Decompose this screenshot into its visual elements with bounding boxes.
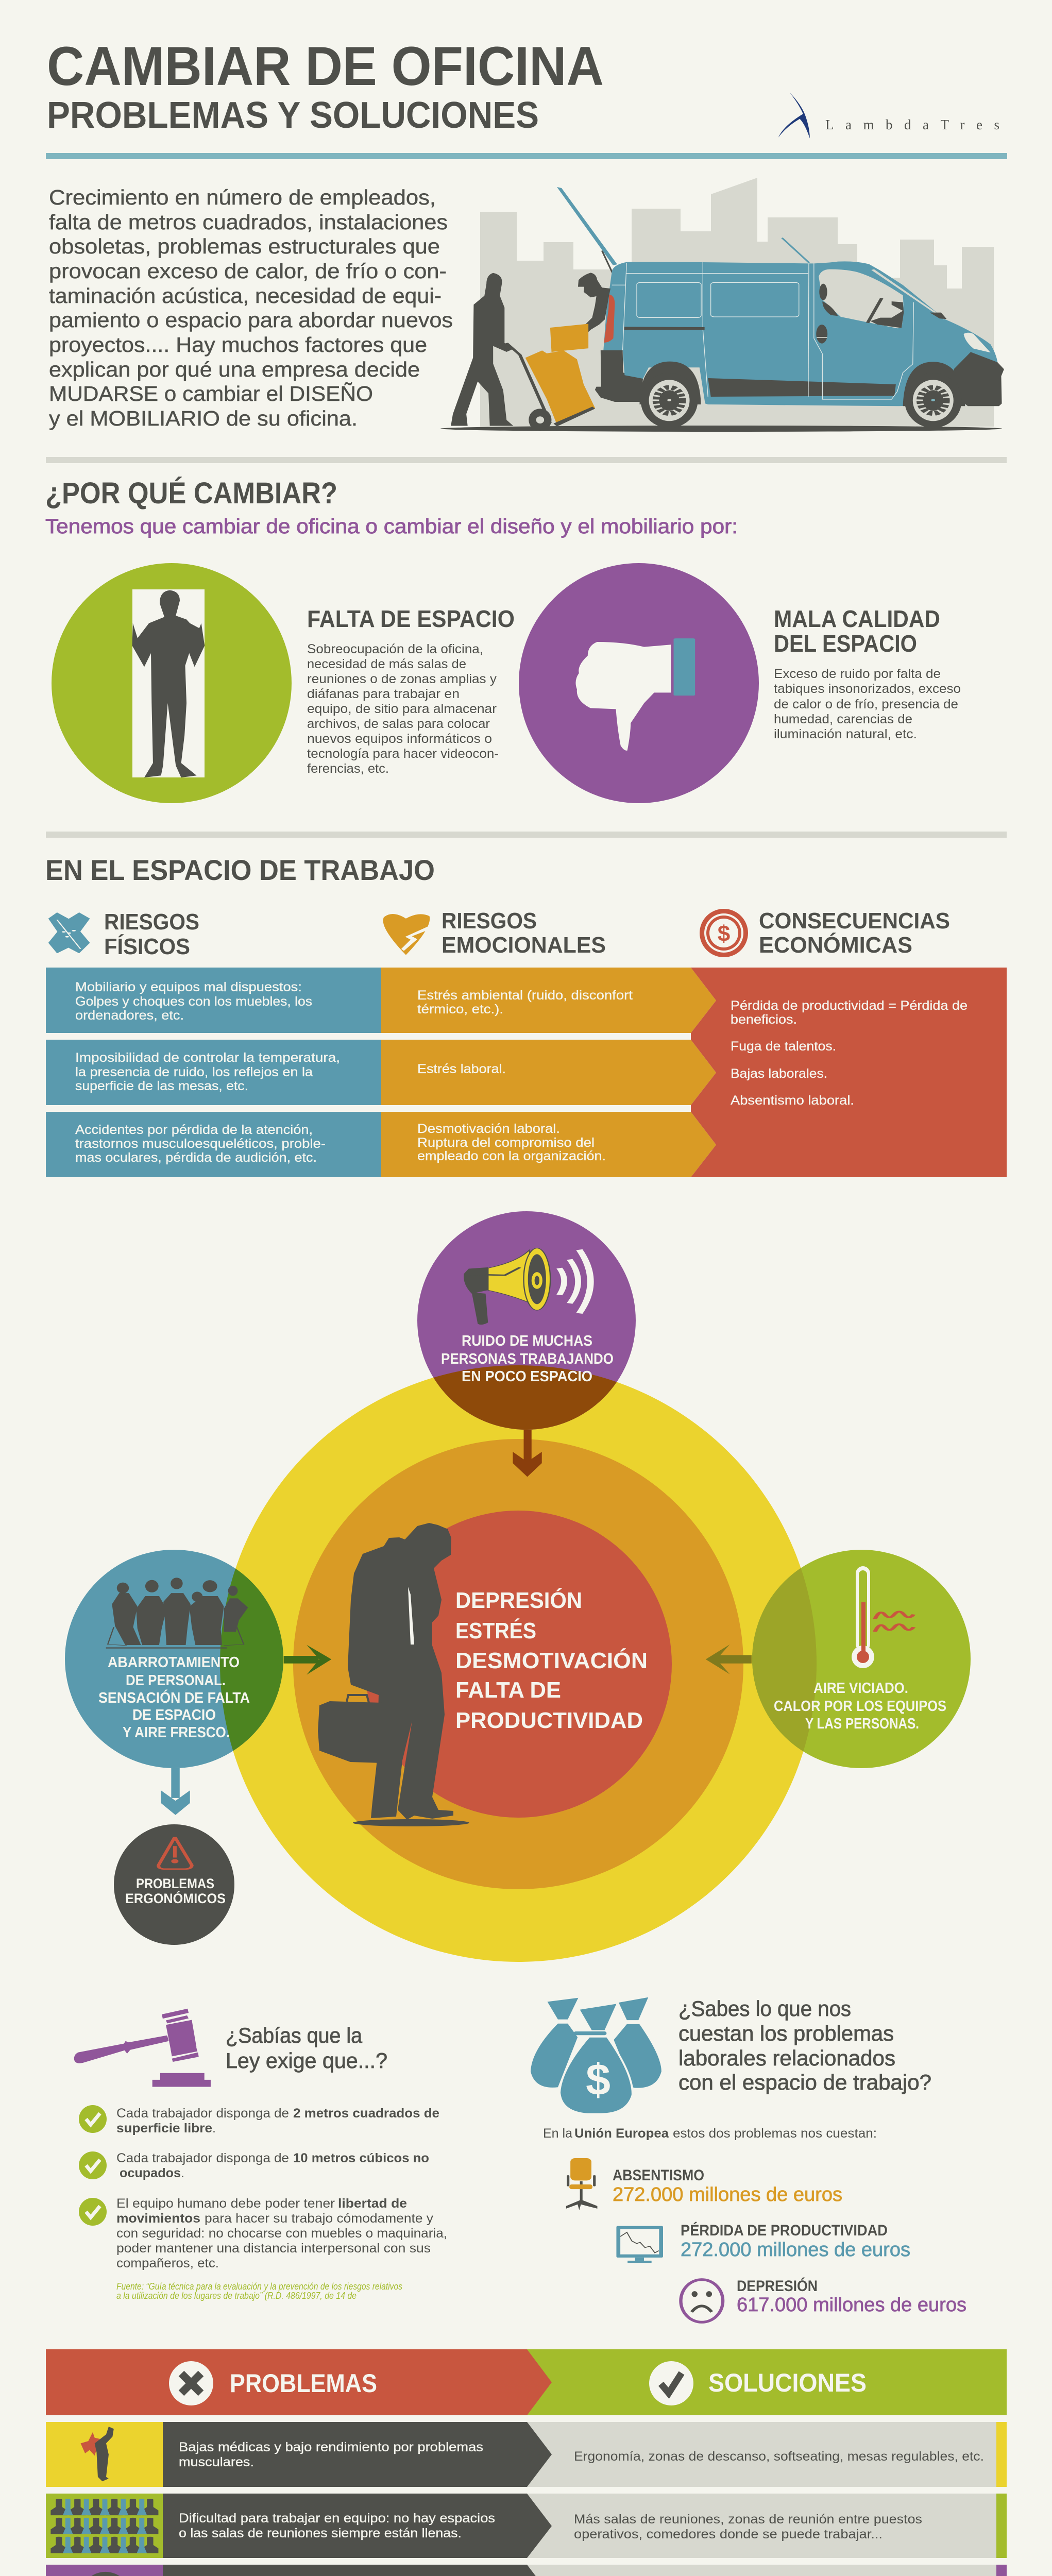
column: riesgos emocionales [381, 968, 716, 1177]
column: consecuencias económicas: Pérdida de productividad = Pérdida de [731, 998, 968, 1013]
checklist item 1: 2 metros cuadrados de [293, 2106, 439, 2121]
panel: coste de los problemas laborales [531, 1996, 966, 2322]
checklist item 2 [79, 2151, 429, 2180]
row 2: trabajo en equipo: Dificultad para trabajar en equipo: no hay espacios [179, 2511, 495, 2526]
column: consecuencias económicas: Absentismo laboral. [731, 1093, 854, 1108]
text: Sobreocupación de la oficina, [307, 642, 483, 656]
checklist item 2: . [181, 2166, 184, 2180]
checklist item 1 [79, 2105, 439, 2136]
column heading: riesgos emocionales: EMOCIONALES [442, 933, 606, 958]
icon: coin [700, 909, 748, 957]
checklist item 3: libertad de [338, 2196, 407, 2211]
callout: abarrotamiento: ABARROTAMIENTO [108, 1654, 240, 1671]
intro paragraph: MUDARSE o cambiar el DISEÑO [49, 382, 373, 405]
checklist item 3: poder mantener una distancia interpersonal con sus [116, 2241, 431, 2256]
heading [678, 1996, 931, 2094]
heading [226, 2023, 387, 2073]
icon: back pain [81, 2427, 114, 2481]
callout: aire viciado: Y LAS PERSONAS. [805, 1716, 919, 1732]
text: FALTA DE ESPACIO [307, 605, 515, 632]
row 1: problemas musculares: Bajas médicas y bajo rendimiento por problemas [179, 2440, 483, 2454]
callout: problemas ergonómicos: PROBLEMAS [136, 1876, 214, 1891]
icon: crowd of people [106, 1578, 248, 1649]
icon: coin: $ [718, 921, 730, 946]
checklist item 1: Cada trabajador disponga de [116, 2106, 289, 2121]
checklist item 2: 10 metros cúbicos no [293, 2151, 429, 2165]
heading: por qué cambiar: Tenemos que cambiar de oficina o cambiar el diseño y el mobiliario por: [45, 515, 738, 538]
row 2: trabajo en equipo: operativos, comedores donde se puede trabajar... [574, 2527, 883, 2541]
intro line: Unión Europea [574, 2126, 669, 2141]
icon: monitor with falling chart [616, 2226, 663, 2263]
icon: sad face [681, 2280, 723, 2322]
row 1: problemas musculares [46, 2422, 1007, 2487]
central effects text: DEPRESIÓN [455, 1587, 582, 1613]
text: ferencias, etc. [307, 761, 389, 776]
text: archivos, de salas para colocar [307, 717, 490, 731]
column: riesgos emocionales: Estrés laboral. [417, 1062, 506, 1076]
intro paragraph: provocan exceso de calor, de frío o con- [49, 259, 447, 283]
callout: ruido: RUIDO DE MUCHAS [462, 1333, 592, 1349]
text: tecnología para hacer videocon- [307, 747, 499, 761]
source note [116, 2281, 402, 2301]
column: consecuencias económicas: beneficios. [731, 1012, 797, 1027]
column heading: riesgos físicos: RIESGOS [104, 909, 199, 935]
column: riesgos físicos: superficie de las mesas, etc. [75, 1079, 248, 1093]
text: diáfanas para trabajar en [307, 687, 460, 701]
stat: pérdida de productividad [616, 2222, 910, 2263]
text: humedad, carencias de [774, 712, 912, 726]
arrow: abarrotamiento to center [284, 1645, 331, 1675]
table header: problemas y soluciones: SOLUCIONES [708, 2368, 867, 2397]
text: Exceso de ruido por falta de [774, 667, 941, 681]
column heading: consecuencias económicas: CONSECUENCIAS [759, 908, 950, 934]
column heading: riesgos emocionales [383, 908, 606, 958]
heading: por qué cambiar: ¿POR QUÉ CAMBIAR? [45, 477, 337, 510]
heading: con el espacio de trabajo? [678, 2070, 931, 2094]
text [774, 605, 961, 741]
text: iluminación natural, etc. [774, 727, 917, 741]
column: riesgos emocionales: térmico, etc.). [417, 1002, 503, 1016]
text: equipo, de sitio para almacenar [307, 702, 497, 716]
diagram: concentric circles of effects [65, 1211, 971, 1962]
callout: aire viciado: AIRE VICIADO. [813, 1680, 908, 1697]
column: riesgos físicos: ordenadores, etc. [75, 1008, 184, 1023]
intro line: estos dos problemas nos cuestan: [673, 2126, 877, 2141]
central effects text [455, 1587, 648, 1733]
column: riesgos físicos [46, 968, 381, 1177]
column: riesgos físicos: Accidentes por pérdida de la atención, [75, 1123, 313, 1137]
checklist item 3: El equipo humano debe poder tener [116, 2196, 335, 2211]
table: riesgos y consecuencias [46, 968, 1007, 1177]
icon: thumbs down [519, 563, 759, 803]
intro paragraph [49, 185, 453, 430]
panel: falta de espacio [52, 563, 515, 803]
checklist item 1: superficie libre [116, 2121, 212, 2136]
stat: pérdida de productividad: PÉRDIDA DE PRODUCTIVIDAD [681, 2222, 888, 2239]
column: riesgos físicos: trastornos musculoesqueléticos, proble- [75, 1137, 326, 1151]
icon: crowded people [50, 2499, 158, 2553]
intro paragraph: obsoletas, problemas estructurales que [49, 234, 440, 258]
checklist item 3: con seguridad: no chocarse con muebles o maquinaria, [116, 2226, 447, 2241]
callout: problemas ergonómicos: ERGONÓMICOS [125, 1890, 226, 1906]
heading: laborales relacionados [678, 2046, 895, 2070]
column: riesgos físicos: Mobiliario y equipos mal dispuestos: [75, 980, 302, 994]
column: riesgos emocionales: empleado con la organización. [417, 1149, 606, 1163]
checklist item 2: Cada trabajador disponga de [116, 2151, 289, 2165]
logo: LambdaTres [778, 93, 999, 139]
row 2: trabajo en equipo: o las salas de reuniones siempre están llenas. [179, 2526, 462, 2540]
column: riesgos físicos: Imposibilidad de controlar la temperatura, [75, 1050, 340, 1065]
column heading: riesgos emocionales: RIESGOS [442, 908, 537, 934]
icon: warning [159, 1837, 192, 1869]
column: consecuencias económicas [691, 968, 1007, 1177]
arrow: aire viciado to center [706, 1645, 752, 1674]
intro paragraph: taminación acústica, necesidad de equi- [49, 284, 442, 308]
checklist item 2: ocupados [120, 2166, 181, 2180]
title [47, 35, 604, 136]
panel: la ley exige [74, 2009, 447, 2301]
column: consecuencias económicas: Fuga de talentos. [731, 1039, 836, 1054]
heading: ¿Sabes lo que nos [678, 1996, 851, 2021]
table header: problemas y soluciones: PROBLEMAS [230, 2369, 377, 2398]
concentric circles [220, 1365, 817, 1962]
figure: depressed man with briefcase [318, 1523, 469, 1826]
row 1: problemas musculares: musculares. [179, 2455, 254, 2469]
source note: Fuente: “Guía técnica para la evaluación y la prevención de los riesgos relativos [116, 2281, 402, 2292]
text: tabiques insonorizados, exceso [774, 682, 961, 696]
intro line [543, 2126, 877, 2141]
briefcase [318, 1701, 382, 1763]
callout: abarrotamiento: SENSACIÓN DE FALTA [98, 1689, 250, 1706]
table header: problemas y soluciones [46, 2349, 1007, 2415]
callout: ruido: EN POCO ESPACIO [462, 1368, 592, 1385]
icon: broken heart [383, 914, 430, 955]
intro paragraph: y el MOBILIARIO de su oficina. [49, 406, 358, 430]
central effects text: PRODUCTIVIDAD [455, 1708, 643, 1733]
source note: a la utilización de los lugares de trabajo” (R.D. 486/1997, de 14 de [116, 2291, 357, 2301]
stat: depresión: 617.000 millones de euros [737, 2294, 966, 2316]
stat: absentismo: ABSENTISMO [613, 2167, 704, 2184]
stat: pérdida de productividad: 272.000 millones de euros [681, 2239, 910, 2261]
text [307, 605, 515, 776]
column: riesgos físicos: mas oculares, pérdida de audición, etc. [75, 1150, 317, 1165]
column: riesgos emocionales: Ruptura del compromiso del [417, 1136, 595, 1150]
intro paragraph: Crecimiento en número de empleados, [49, 185, 436, 209]
icon: gavel [74, 2009, 211, 2087]
stat: depresión [681, 2277, 966, 2322]
arrow: abarrotamiento to problemas ergonómicos [161, 1768, 190, 1815]
column heading: consecuencias económicas: ECONÓMICAS [759, 932, 912, 958]
stat: depresión: DEPRESIÓN [737, 2277, 818, 2295]
intro line: En la [543, 2126, 572, 2141]
icon: check [649, 2361, 693, 2405]
city skyline [480, 178, 994, 427]
checklist item 1: . [212, 2121, 216, 2136]
callout: problemas ergonómicos [114, 1824, 234, 1945]
front wheel [905, 373, 962, 428]
text: de calor o de frío, presencia de [774, 697, 958, 711]
icon: bandage [48, 912, 90, 953]
column: riesgos físicos: la presencia de ruido, los reflejos en la [75, 1065, 313, 1079]
checklist item 3 [79, 2196, 447, 2270]
heading: Ley exige que...? [226, 2048, 387, 2073]
van [564, 238, 1004, 428]
callout: ruido [417, 1211, 636, 1430]
heading: cuestan los problemas [678, 2021, 894, 2045]
callout: aire viciado [752, 1550, 971, 1768]
callout: abarrotamiento [65, 1550, 283, 1768]
logo: LambdaTres: LambdaTres [825, 117, 999, 132]
stat: absentismo [566, 2158, 842, 2210]
row 3: uso intensivo [46, 2565, 1007, 2576]
icon: money bags: $ [586, 2055, 610, 2105]
checklist item 3: movimientos [116, 2211, 200, 2226]
row 2: trabajo en equipo: Más salas de reuniones, zonas de reunión entre puestos [574, 2512, 922, 2527]
callout: aire viciado: CALOR POR LOS EQUIPOS [774, 1698, 946, 1715]
heading: en el espacio de trabajo: EN EL ESPACIO DE TRABAJO [45, 854, 435, 886]
central effects text: ESTRÉS [455, 1618, 536, 1643]
mover walking [451, 273, 513, 426]
stat: absentismo: 272.000 millones de euros [613, 2184, 842, 2206]
intro paragraph: falta de metros cuadrados, instalaciones [49, 210, 448, 234]
column: consecuencias económicas: Bajas laborales. [731, 1066, 827, 1081]
central effects text: DESMOTIVACIÓN [455, 1648, 648, 1673]
central effects text: FALTA DE [455, 1677, 561, 1703]
icon: money bags [531, 1997, 661, 2114]
text: necesidad de más salas de [307, 657, 466, 671]
intro paragraph: explican por qué una empresa decide [49, 358, 420, 381]
icon: person in narrow space [52, 563, 292, 803]
column: riesgos emocionales: Estrés ambiental (ruido, disconfort [417, 988, 633, 1003]
callout: abarrotamiento: DE PERSONAL. [126, 1672, 226, 1689]
rear wheel [641, 373, 698, 428]
checklist item 3: para hacer su trabajo cómodamente y [205, 2211, 434, 2226]
row 2: trabajo en equipo [46, 2494, 1007, 2558]
icon: thermometer [852, 1566, 913, 1668]
text: nuevos equipos informáticos o [307, 732, 492, 746]
title: CAMBIAR DE OFICINA [47, 35, 604, 97]
title: PROBLEMAS Y SOLUCIONES [47, 95, 539, 136]
heading: ¿Sabías que la [226, 2023, 363, 2047]
text: reuniones o de zonas amplias y [307, 672, 497, 686]
heading: por qué cambiar [45, 477, 738, 538]
illustration: moving van, city and movers [440, 178, 1004, 432]
arrow: ruido to center [513, 1430, 542, 1477]
open tailgate [557, 187, 617, 265]
column heading: riesgos físicos [48, 909, 199, 959]
intro paragraph: proyectos.... Hay muchos factores que [49, 333, 427, 357]
icon: megaphone [464, 1248, 590, 1325]
icon: office chair [566, 2158, 597, 2210]
row 1: problemas musculares: Ergonomía, zonas de descanso, softseating, mesas regulables, etc. [574, 2449, 984, 2464]
column: riesgos emocionales: Desmotivación laboral. [417, 1122, 560, 1136]
text: DEL ESPACIO [774, 630, 917, 657]
boxes and hand truck [451, 273, 595, 431]
callout: ruido: PERSONAS TRABAJANDO [441, 1351, 614, 1367]
ground shadow [440, 426, 1002, 432]
icon: cross [169, 2361, 213, 2405]
column heading: riesgos físicos: FÍSICOS [104, 934, 190, 959]
mover loading box [564, 273, 610, 346]
intro paragraph: pamiento o espacio para abordar nuevos [49, 308, 453, 332]
icon: clock [80, 2572, 131, 2576]
checklist item 3: compañeros, etc. [116, 2256, 219, 2270]
column: riesgos físicos: Golpes y choques con los muebles, los [75, 994, 312, 1009]
callout: abarrotamiento: Y AIRE FRESCO. [123, 1724, 230, 1741]
panel: mala calidad del espacio [519, 563, 961, 803]
text: MALA CALIDAD [774, 605, 940, 632]
column heading: consecuencias económicas [700, 908, 950, 958]
callout: abarrotamiento: DE ESPACIO [132, 1707, 216, 1723]
